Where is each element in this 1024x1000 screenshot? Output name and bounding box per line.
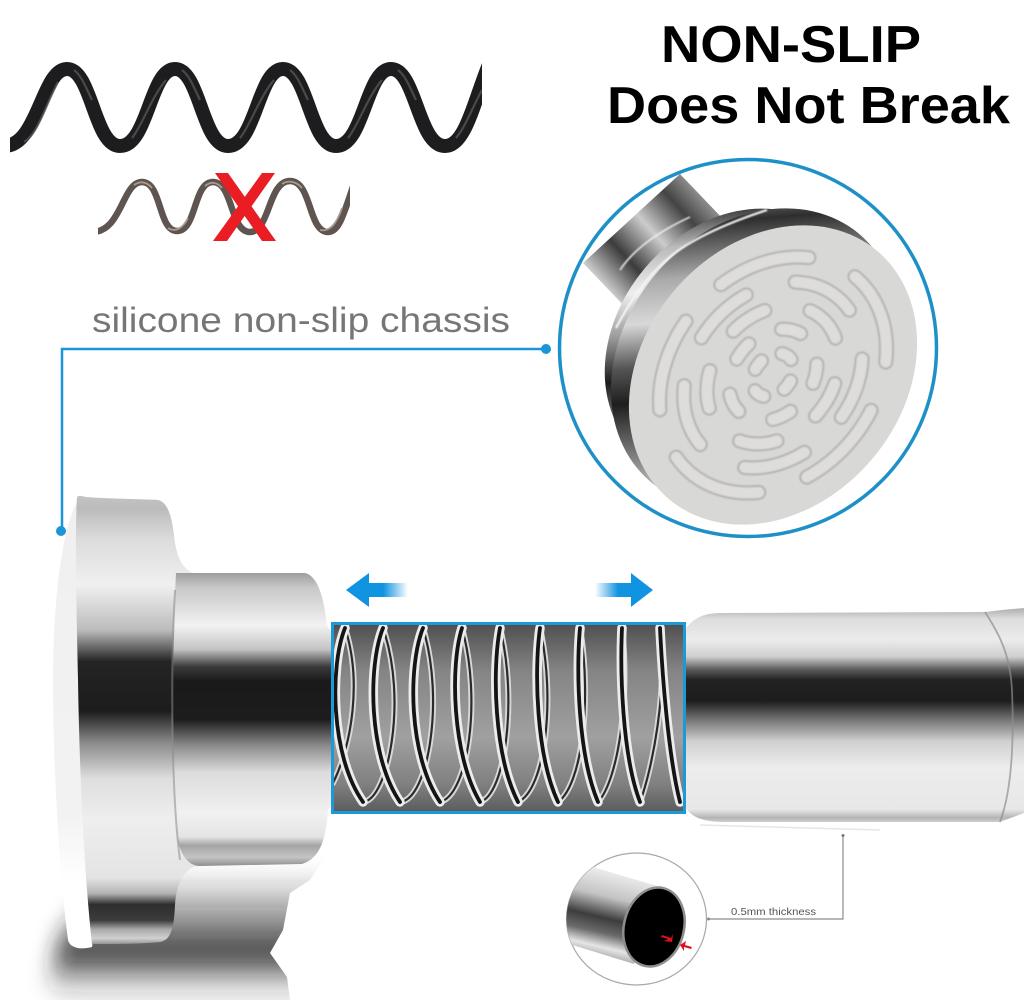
panel: silicone base detail circle — [558, 158, 938, 538]
tube body — [566, 867, 658, 964]
steel coil spring — [333, 628, 680, 802]
icon: red X — [213, 173, 276, 241]
panel: tube thickness detail — [560, 853, 706, 985]
silicone pad edge — [53, 496, 100, 948]
collar — [604, 208, 772, 418]
panel: spring window — [332, 623, 685, 813]
arrow: right — [595, 573, 653, 607]
title — [607, 16, 1010, 135]
title: Does Not Break — [607, 77, 1010, 135]
flange — [76, 496, 198, 944]
blue leader line — [56, 344, 551, 536]
title: NON-SLIP — [661, 16, 921, 74]
icon: red thickness arrows — [661, 934, 692, 951]
metal rim — [611, 208, 872, 486]
silicone face — [628, 225, 917, 525]
arrow: left — [346, 573, 408, 607]
thickness label: 0.5mm thickness — [731, 906, 816, 918]
drop shadow under base — [48, 870, 360, 1000]
panel: chrome tube on right — [686, 608, 1024, 830]
thick black spring — [4, 62, 490, 146]
thin rejected spring with red cross — [92, 173, 356, 241]
callout label: silicone non-slip chassis — [92, 301, 510, 340]
neck — [173, 573, 336, 866]
rod stub — [583, 174, 724, 310]
thickness leader line — [707, 834, 844, 920]
silicone ribs — [652, 249, 894, 501]
panel: end cap assembly — [53, 496, 336, 948]
tube opening — [622, 886, 686, 968]
